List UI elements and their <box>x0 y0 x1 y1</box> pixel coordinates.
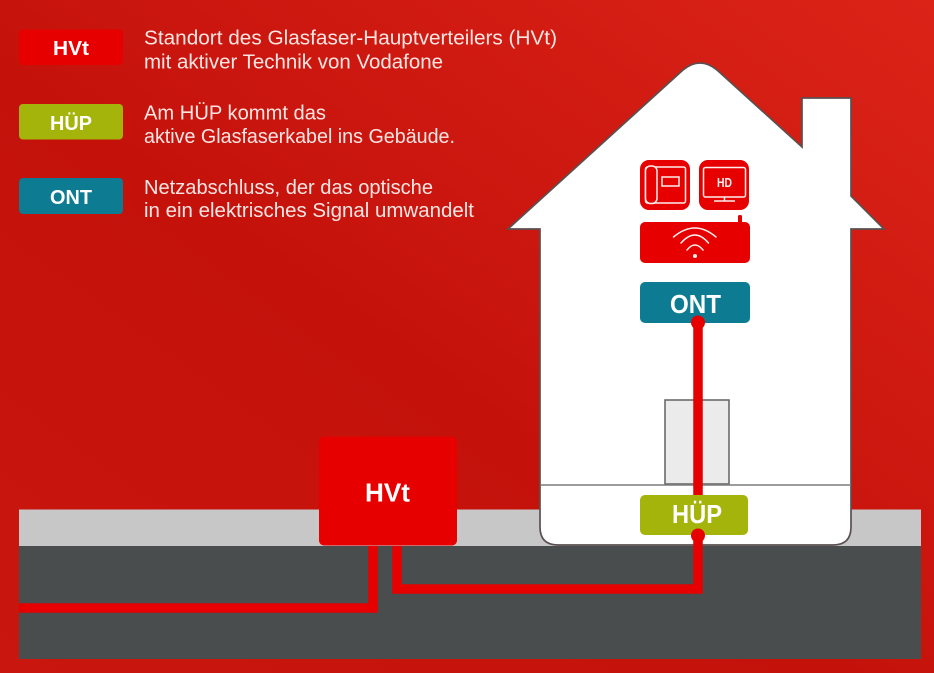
ground: pavement strip <box>19 510 921 546</box>
icon: wifi router <box>640 215 750 263</box>
legend text: HÜP description: Am HÜP kommt das <box>144 102 326 124</box>
HÜP box: HÜP <box>672 500 722 529</box>
cable: left incoming <box>19 546 373 608</box>
ONT cable connector <box>691 316 705 330</box>
legend: HVt: HVt <box>53 38 89 60</box>
HÜP cable connector <box>691 528 705 542</box>
ground: soil <box>19 546 921 659</box>
HVt box: HVt <box>365 480 411 508</box>
house floor line <box>541 484 851 486</box>
legend text: HVt description: Standort des Glasfaser-Hauptverteilers (HVt) <box>144 26 557 50</box>
cable: HÜP to ONT riser <box>693 322 703 496</box>
legend text: HVt description <box>144 26 557 74</box>
ONT box: ONT <box>670 291 721 319</box>
legend: HVt <box>19 30 123 65</box>
house <box>508 63 884 545</box>
legend: HÜP: HÜP <box>50 112 92 135</box>
icon: telephone <box>640 160 690 210</box>
legend text: HVt description: mit aktiver Technik von Vodafone <box>144 50 443 74</box>
legend text: HÜP description: aktive Glasfaserkabel ins Gebäude. <box>144 125 455 148</box>
legend: ONT <box>19 178 123 214</box>
legend text: ONT description: in ein elektrisches Signal umwandelt <box>144 199 474 222</box>
HÜP box <box>640 495 748 535</box>
house door <box>665 400 729 484</box>
icon: HD television: HD <box>717 176 732 190</box>
legend text: ONT description <box>144 176 474 222</box>
HVt box <box>319 436 457 546</box>
legend text: HÜP description <box>144 102 455 148</box>
legend: HÜP <box>19 104 123 140</box>
legend text: ONT description: Netzabschluss, der das optische <box>144 176 433 199</box>
ONT box <box>640 282 750 323</box>
icon: HD television <box>699 160 749 210</box>
legend: ONT: ONT <box>50 187 92 209</box>
cable: HVt to HÜP underground <box>397 536 698 589</box>
